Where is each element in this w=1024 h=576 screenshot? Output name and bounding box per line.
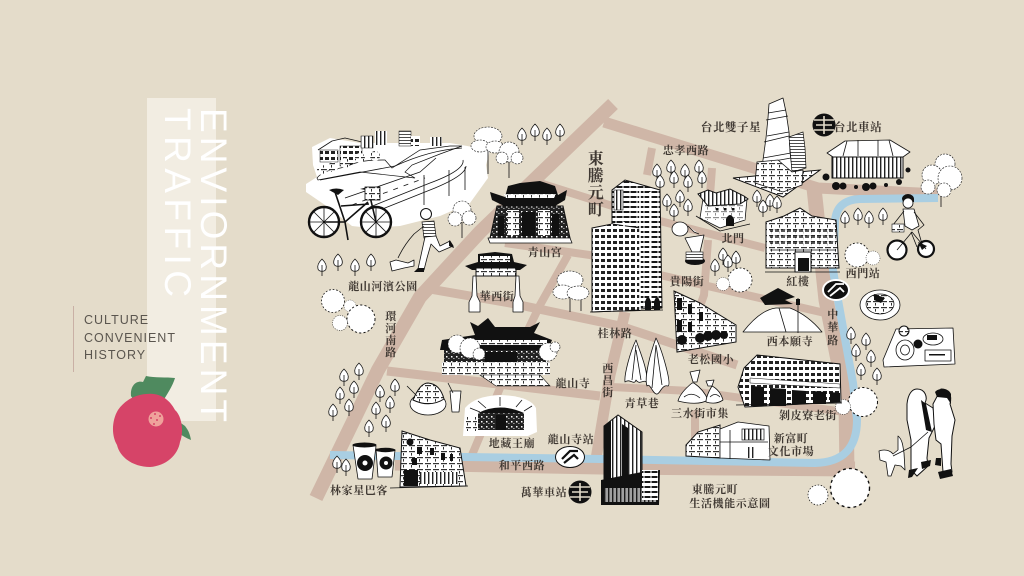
map labels: 河 — [385, 322, 397, 335]
map labels: 文化市場 — [768, 444, 814, 458]
road network — [316, 104, 938, 498]
map labels: 南 — [385, 333, 397, 347]
map labels: 北門 — [721, 231, 745, 245]
illustration: Laosong Elementary School — [674, 291, 736, 352]
illustration: Lin family house — [390, 431, 468, 488]
map labels: 龍山寺站 — [548, 432, 594, 446]
illustration: rental bike — [309, 187, 391, 240]
map labels: 町 — [588, 201, 604, 219]
map labels: 剝皮寮老街 — [779, 408, 837, 422]
white park backdrop — [306, 138, 490, 228]
illustration: cyclist — [888, 194, 934, 260]
illustration: Sanshui market bags — [678, 370, 723, 403]
map labels: 林家星巴客 — [330, 483, 388, 497]
keyword list: CONVENIENT — [84, 331, 176, 345]
map labels: 龍山河濱公園 — [348, 279, 418, 293]
icon: Longshan Temple MRT — [556, 446, 584, 468]
map labels: 青草巷 — [625, 396, 659, 410]
keyword list: CULTURE — [84, 313, 149, 327]
keyword list: HISTORY — [84, 348, 146, 362]
map labels: 東騰元町 — [692, 482, 738, 496]
map labels: 元 — [588, 184, 604, 202]
illustration: Nishi Honganji — [743, 288, 822, 333]
map labels: 環 — [385, 310, 397, 323]
map labels: 東 — [588, 150, 604, 168]
map labels: 青山宮 — [528, 245, 562, 259]
illustration: Dizang temple — [463, 395, 537, 436]
big trees — [448, 127, 962, 312]
map labels: 騰 — [588, 166, 604, 185]
small tree groves — [318, 124, 887, 476]
map labels: 和平西路 — [499, 458, 545, 472]
illustration: Qingshan temple — [488, 181, 572, 243]
icon: Taipei railway station — [812, 114, 836, 136]
map labels: 路 — [827, 333, 839, 347]
metro line — [330, 198, 938, 463]
title: ENVIORNMENT: ENVIORNMENT — [193, 108, 234, 422]
illustration: set meal tray — [883, 326, 955, 367]
illustration: Starbucks cups — [352, 442, 396, 479]
map labels: 台北雙子星 — [701, 120, 761, 134]
illustration: plated meal — [860, 290, 900, 320]
map labels: 龍山寺 — [556, 376, 590, 390]
map labels: 華 — [827, 320, 839, 334]
map labels: 三水街市集 — [671, 406, 729, 420]
map labels: 老松國小 — [688, 352, 735, 366]
illustration: riverside skyline and road — [317, 131, 466, 210]
panel: title backdrop — [147, 98, 216, 421]
map labels: 萬華車站 — [521, 485, 567, 499]
illustration: teapot and dripper — [672, 222, 705, 265]
bushes — [322, 243, 880, 508]
map labels: 中 — [827, 307, 839, 321]
illustration: Red House — [765, 208, 840, 272]
map labels: 紅樓 — [786, 274, 810, 288]
icon: camellia flower — [113, 376, 191, 467]
map labels: 新富町 — [774, 431, 808, 445]
illustration: Bopiliao old street — [736, 355, 842, 407]
illustration: Taipei Twin Towers — [733, 98, 820, 197]
map labels: 華西街 — [480, 289, 514, 303]
map labels: 生活機能示意圖 — [689, 496, 771, 510]
illustration: runner with dog — [390, 208, 454, 272]
illustration: couple walking dog — [879, 389, 955, 479]
map labels: 西 — [602, 361, 614, 375]
map labels: 路 — [385, 345, 397, 359]
map labels — [330, 120, 882, 510]
map labels: 台北車站 — [834, 120, 882, 134]
title: TRAFFIC: TRAFFIC — [157, 108, 198, 297]
illustration: Dongteng residential tower — [590, 180, 663, 312]
map labels: 西門站 — [846, 266, 880, 280]
illustration: Longshan Temple — [440, 318, 560, 386]
icon: Wanhua railway station — [568, 480, 592, 504]
illustration: herbs — [625, 338, 669, 394]
keyword list — [73, 306, 176, 372]
map labels: 地藏王廟 — [489, 436, 535, 450]
illustration: shaved ice — [407, 383, 446, 415]
icon: Ximen MRT — [822, 279, 850, 301]
illustration: Taipei Main Station — [822, 140, 910, 191]
map labels: 街 — [602, 385, 614, 399]
illustration: North Gate — [696, 189, 750, 231]
illustration: Wanhua tower — [601, 415, 660, 505]
illustration: Xinfu market — [686, 422, 770, 460]
map labels: 貴陽街 — [670, 274, 704, 288]
map labels: 忠孝西路 — [663, 143, 709, 157]
map labels: 桂林路 — [598, 326, 632, 340]
map labels: 西本願寺 — [767, 334, 813, 348]
illustration: iced drink — [448, 383, 461, 412]
map labels: 昌 — [602, 373, 614, 387]
illustration: Huaxi Street gate — [465, 252, 527, 312]
